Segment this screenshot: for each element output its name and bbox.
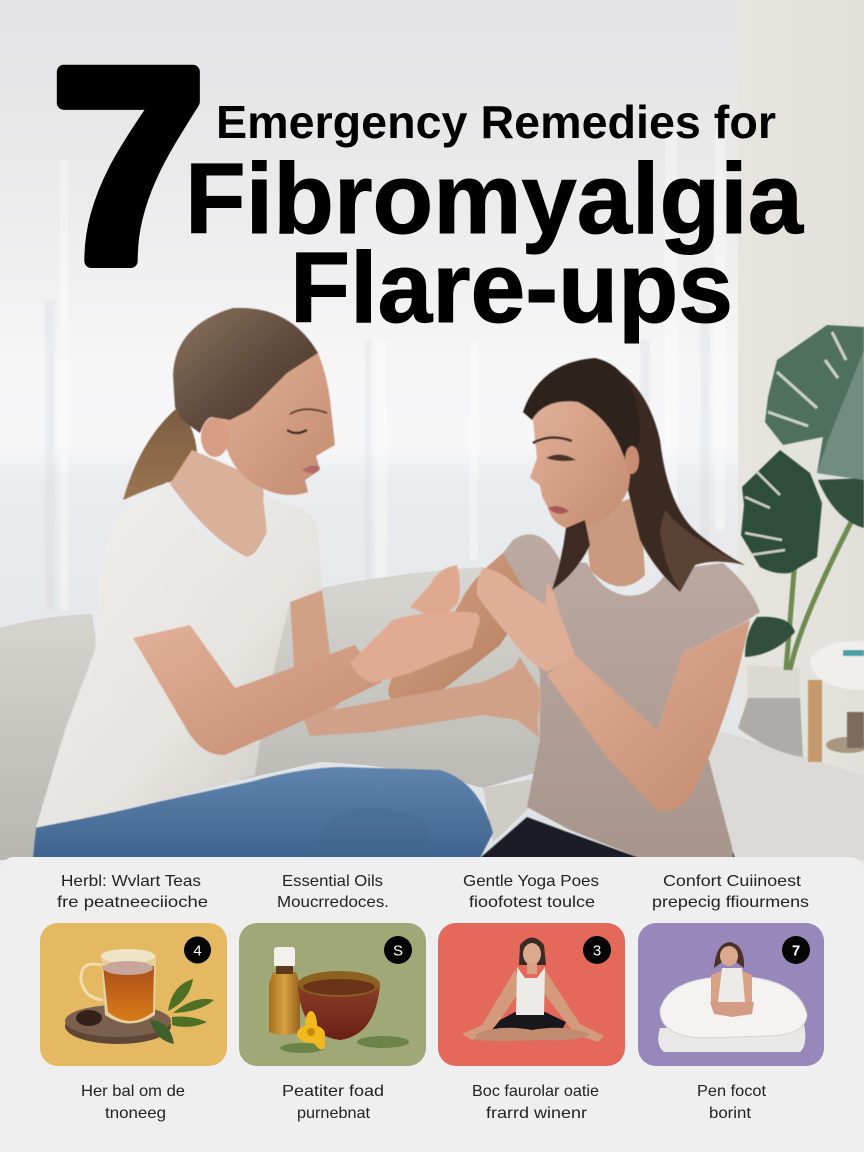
yellow flower <box>297 1011 328 1051</box>
face of patient <box>530 399 632 530</box>
caption top 3: Gentle Yoga Poes <box>463 873 599 890</box>
number badge 3 <box>583 936 611 964</box>
woman on left: helper <box>33 308 540 858</box>
number badge 4 <box>184 936 211 964</box>
caption bottom 4: Pen focot <box>697 1083 767 1100</box>
caption bottom 1: Her bal om de <box>81 1083 185 1100</box>
back cushion <box>240 567 545 788</box>
caption top 3: fioofotest toulce <box>469 894 595 911</box>
mauve shirt <box>503 534 760 858</box>
remedy column 1: herbal teas <box>40 873 227 1122</box>
beads <box>76 1010 102 1026</box>
card 3 <box>438 923 625 1066</box>
bottom remedies panel <box>0 857 864 1152</box>
big numeral 7: 7 <box>52 13 205 320</box>
caption bottom 3 <box>472 1083 599 1122</box>
card 4 <box>638 923 824 1066</box>
remedy column 3: gentle yoga <box>438 873 625 1122</box>
caption bottom 2: Peatiter foad <box>282 1083 384 1100</box>
title <box>52 13 804 344</box>
jeans <box>33 767 493 858</box>
neck <box>170 450 268 557</box>
seat centre <box>483 778 540 842</box>
third dark leaf <box>818 478 864 528</box>
seated figure <box>710 942 754 1017</box>
near arm of patient <box>547 620 750 811</box>
caption top 2: Essential Oils <box>282 873 383 890</box>
herbs <box>280 1036 409 1053</box>
ponytail <box>123 408 197 500</box>
plant and side table <box>738 325 864 762</box>
caption bottom 2: purnebnat <box>297 1105 371 1122</box>
hand on shoulder <box>477 568 575 672</box>
ear <box>201 417 229 457</box>
helper facial details <box>287 409 327 473</box>
number badge 7: 7 <box>792 942 800 960</box>
remedy column 2: essential oils <box>239 873 426 1122</box>
caption top 1: fre peatneeciioche <box>57 894 208 911</box>
yoga figure <box>462 938 604 1042</box>
caption top 4 <box>652 873 809 911</box>
number badge 4: 4 <box>193 942 202 960</box>
number badge 3: 3 <box>593 942 601 960</box>
plant pot <box>738 665 803 757</box>
card 2 <box>239 923 426 1066</box>
glass mug <box>81 949 156 1024</box>
plant stems <box>786 505 860 670</box>
left sofa cushion <box>0 614 130 860</box>
front hand <box>350 612 480 683</box>
caption bottom 3: Boc faurolar oatie <box>472 1083 599 1100</box>
caption bottom 4 <box>697 1083 767 1122</box>
hair lock left <box>552 520 590 590</box>
background: living room wall and sheer curtain <box>0 0 864 860</box>
pants <box>480 817 735 858</box>
caption top 1: Herbl: Wvlart Teas <box>61 873 201 890</box>
caption top 1 <box>57 873 208 911</box>
title line: Flare-ups: Flare-ups <box>290 232 733 344</box>
upper cushion <box>660 977 807 1038</box>
caption top 2: Moucrredoces. <box>277 894 389 911</box>
far forearm and hand <box>305 657 540 738</box>
white shirt <box>36 482 322 827</box>
number badge 7 <box>782 936 810 964</box>
low leaf <box>745 617 795 657</box>
number badge 5 <box>384 936 412 964</box>
raised hand <box>410 565 460 620</box>
ear <box>625 446 639 474</box>
caption top 3 <box>463 873 599 911</box>
oil bottle <box>269 947 300 1035</box>
plate <box>65 1005 171 1044</box>
neck <box>585 495 645 586</box>
patient facial details <box>533 437 576 514</box>
remedy column 4: comfort cushions <box>638 873 824 1122</box>
number badge 5: S <box>393 942 403 960</box>
caption bottom 1 <box>81 1083 185 1122</box>
near arm <box>133 625 382 755</box>
sofa <box>0 567 864 860</box>
caption bottom 1: tnoneeg <box>105 1105 166 1122</box>
caption top 4: prepecig ffiourmens <box>652 894 809 911</box>
title line: Fibromyalgia: Fibromyalgia <box>185 143 804 255</box>
woman on right: patient <box>388 358 760 858</box>
caption top 2 <box>277 873 389 911</box>
far arm of patient <box>388 553 530 710</box>
upper far arm <box>290 590 342 736</box>
dark monstera leaf <box>741 450 822 573</box>
large monstera leaf <box>765 325 864 480</box>
title line: Emergency Remedies for: Emergency Remedies for <box>216 96 776 148</box>
lower cushion <box>658 1024 805 1052</box>
hair <box>173 308 318 433</box>
card 1 <box>40 923 227 1066</box>
side table <box>808 641 864 762</box>
hair top <box>523 358 640 470</box>
hair right <box>595 360 745 592</box>
right sofa seat <box>700 726 864 860</box>
caption bottom 4: borint <box>709 1105 752 1122</box>
tea bowl <box>298 971 380 1040</box>
face <box>212 353 335 495</box>
caption bottom 3: frarrd winenr <box>486 1105 588 1122</box>
tea leaves <box>150 979 214 1044</box>
caption top 4: Confort Cuiinoest <box>663 873 802 890</box>
hair right lower highlight <box>660 510 745 590</box>
caption bottom 2 <box>282 1083 384 1122</box>
